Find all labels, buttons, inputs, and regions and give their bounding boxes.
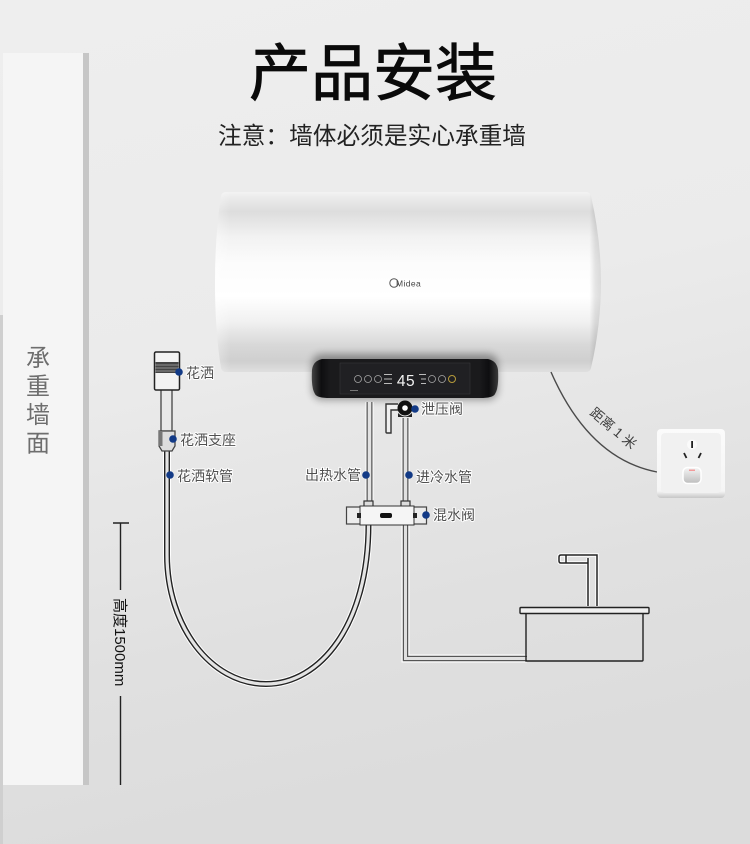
icon: sink and faucet: [520, 555, 649, 661]
shower hose: [167, 450, 368, 684]
title: 产品安装: [249, 40, 497, 109]
temperature readout: 45: [397, 373, 415, 390]
icon: shower head: [154, 352, 180, 451]
cord distance label: 距离 1 米: [587, 404, 640, 452]
callout: relief valve: 泄压阀: [421, 401, 463, 417]
icon: mixing valve: [346, 501, 426, 525]
callout: mixing valve: 混水阀: [433, 507, 475, 523]
icon: wall socket: [657, 429, 725, 498]
icon: control panel: [312, 354, 498, 400]
callout: shower support: 花洒支座: [180, 432, 236, 448]
callout: cold water inlet: 进冷水管: [416, 469, 472, 485]
wall label: 墙: [26, 402, 50, 429]
callout: hot water outlet: 出热水管: [305, 467, 361, 483]
wall label: 重: [26, 374, 50, 400]
hot water pipe: [366, 402, 374, 506]
icon: pressure relief valve: [386, 400, 412, 433]
pipes and hose: [167, 402, 527, 684]
height marker: [111, 523, 129, 785]
wall label: 承: [26, 345, 50, 372]
cold supply to sink: [406, 524, 527, 658]
shower support: [159, 431, 175, 451]
subtitle note: 注意：墙体必须是实心承重墙: [218, 123, 526, 150]
icon: water heater tank: [215, 192, 601, 372]
power cord: [551, 372, 657, 472]
callout: shower hose: 花洒软管: [177, 468, 233, 484]
cold water pipe: [402, 418, 410, 506]
brand logo: Midea: [396, 278, 421, 288]
height marker: 高度1500mm: [111, 598, 128, 686]
callout: shower head: 花洒: [186, 365, 214, 381]
panel: load-bearing wall: [0, 53, 89, 844]
wall label: 面: [26, 430, 50, 458]
